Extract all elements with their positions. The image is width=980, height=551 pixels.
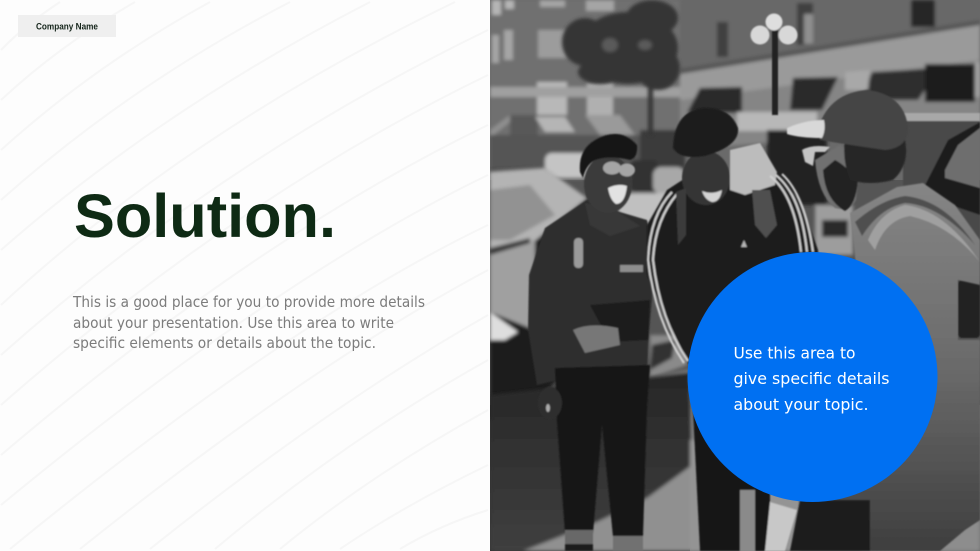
photo: three friends laughing on a street — [490, 0, 980, 551]
callout circle — [688, 252, 938, 502]
street background — [490, 0, 980, 255]
callout circle: about your topic. — [734, 395, 868, 414]
right car — [903, 113, 980, 338]
body text — [72, 293, 425, 352]
person: left friend — [528, 134, 653, 551]
callout circle: give specific details — [734, 369, 890, 388]
title: Solution. — [74, 182, 336, 250]
company name tag — [18, 15, 116, 37]
photo base — [490, 0, 980, 551]
person: middle friend — [647, 108, 820, 551]
company name tag: Company Name — [36, 22, 98, 32]
ground — [490, 370, 980, 551]
body text: about your presentation. Use this area to write — [73, 314, 394, 332]
lamp post — [750, 14, 798, 115]
body text: specific elements or details about the topic. — [73, 334, 376, 352]
body text: This is a good place for you to provide more details — [72, 293, 425, 311]
left car — [490, 168, 687, 420]
tree — [562, 0, 680, 135]
panel: left background — [0, 0, 490, 551]
person: right friend — [787, 90, 980, 551]
callout circle: Use this area to — [734, 344, 856, 362]
